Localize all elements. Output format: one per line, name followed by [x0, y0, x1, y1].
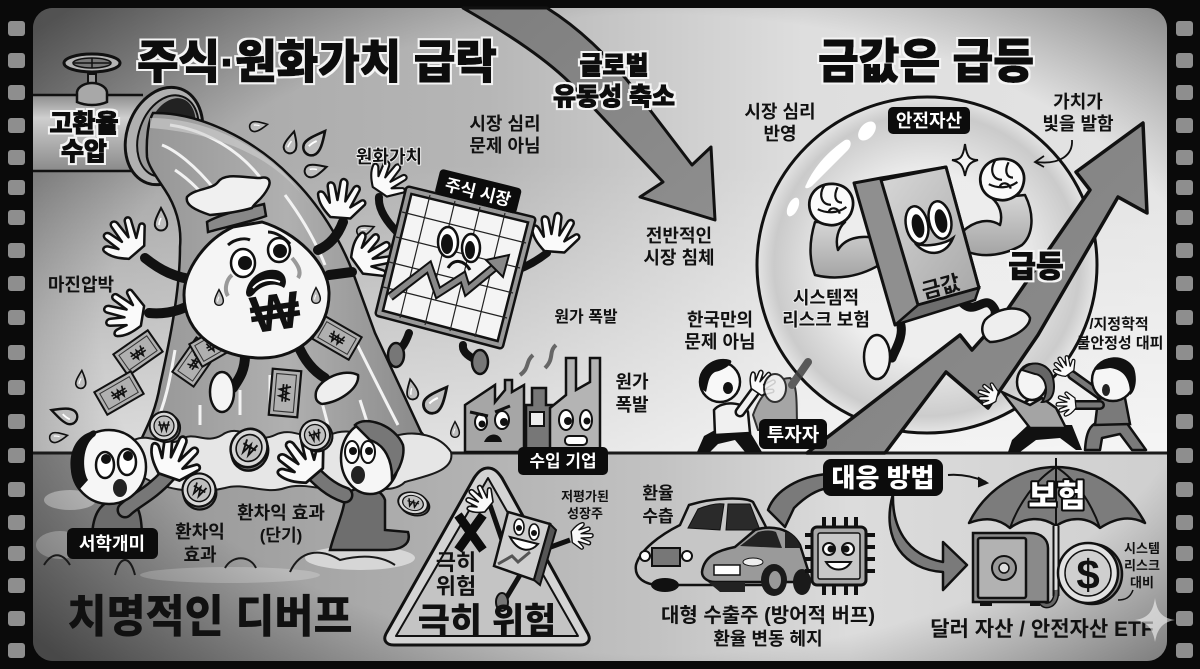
- character: investor man: [697, 359, 781, 452]
- left bicep: [810, 222, 884, 277]
- character: crying money bag: [93, 175, 402, 412]
- label: value shines: 빛을 발함: [1042, 114, 1114, 134]
- gold bar foot: [864, 308, 1030, 379]
- label: geopolitical: [1077, 316, 1163, 352]
- label: undervalued growth stocks: [561, 489, 609, 521]
- label: fx gain effect: 환차익: [175, 522, 225, 542]
- global liquidity arrow: [463, 8, 715, 220]
- label: fx gain effect short term: [237, 503, 325, 545]
- foam: [127, 431, 451, 492]
- label: value shines: 가치가: [1053, 92, 1103, 112]
- danger triangle: [385, 468, 593, 645]
- label: won symbol: ₩: [247, 281, 304, 345]
- label: investors pill: 투자자: [767, 424, 820, 446]
- label: retail investors pill: 서학개미: [79, 534, 145, 554]
- safe: [973, 533, 1048, 604]
- right bicep: [962, 195, 1031, 255]
- label: won value: 원화가치: [356, 147, 422, 167]
- label: systemic risk hedge: 리스크 보험: [782, 310, 870, 330]
- label: market slump: [643, 226, 715, 268]
- label: importers pill: 수입 기업: [529, 452, 597, 471]
- label: surge: 급등: [1008, 251, 1064, 284]
- label: geopolitical: 불안정성 대피: [1077, 335, 1163, 352]
- label: retail investors pill: [67, 528, 158, 559]
- pipe with valve: [33, 54, 216, 196]
- label: market slump: 전반적인: [646, 226, 712, 246]
- label: high exchange rate pressure: 수압: [61, 138, 107, 166]
- label: not only Korea: 문제 아님: [684, 332, 756, 352]
- icon: sparkle: [952, 144, 978, 176]
- back car details: [640, 504, 760, 592]
- label: market slump: 시장 침체: [643, 248, 715, 268]
- label: high exchange rate pressure: 고환율: [49, 110, 119, 138]
- label: margin pressure: 마진압박: [48, 275, 115, 295]
- chip character: [805, 517, 875, 595]
- factories: [465, 345, 600, 452]
- label: high risk small: 위험: [436, 574, 476, 599]
- label: not a sentiment issue: 시장 심리: [469, 114, 541, 134]
- label: undervalued growth stocks: 성장주: [567, 506, 603, 521]
- label: cost explosion two: 원가: [615, 372, 649, 392]
- label: global liquidity: 글로벌: [579, 52, 649, 80]
- label: geopolitical: /지정학적: [1089, 316, 1149, 333]
- label: high exchange rate pressure: [49, 110, 119, 166]
- character: pushing man: [1049, 351, 1146, 450]
- label: exchange rate: 수츱: [642, 507, 674, 526]
- heading: stock and won fall: 주식·원화가치 급락: [137, 36, 497, 88]
- coins: [150, 412, 432, 519]
- label: cost explosion two: 폭발: [615, 395, 649, 415]
- label: dollar assets: 달러 자산 / 안전자산 ETF: [930, 618, 1154, 641]
- label: system risk prep: 대비: [1130, 575, 1154, 590]
- label: systemic risk hedge: [782, 288, 870, 330]
- label: global liquidity: 유동성 축소: [553, 83, 675, 111]
- label: global liquidity: [553, 52, 675, 111]
- label: fx gain effect: [175, 522, 225, 565]
- label: fx hedge: 환율 변동 헤지: [713, 629, 823, 649]
- label: stock market pill: [434, 168, 522, 214]
- dollar coin: $: [1076, 551, 1100, 598]
- money bills: [94, 316, 362, 417]
- water stream: [134, 113, 440, 455]
- snow mounds: [44, 553, 395, 575]
- label: response methods pill: 대응 방법: [832, 463, 934, 493]
- label: importers pill: [518, 447, 608, 475]
- label: high risk small: 극히: [436, 550, 476, 575]
- label: not only Korea: [684, 310, 756, 352]
- label: cost explosion one: 원가 폭발: [554, 308, 618, 326]
- icon: corner sparkle: [1135, 598, 1175, 642]
- bubble with gold bar: [757, 97, 1097, 433]
- label: exchange rate: 환율: [642, 484, 674, 503]
- label: system risk prep: [1124, 541, 1160, 590]
- label: exchange rate: [642, 484, 674, 526]
- label: safe asset pill: [888, 107, 970, 134]
- label: fx gain effect: 효과: [183, 545, 217, 565]
- label: not a sentiment issue: 문제 아님: [469, 136, 541, 156]
- label: fx gain effect short term: 환차익 효과: [237, 503, 325, 523]
- dollar coin: [1058, 543, 1122, 604]
- label: high risk small: [436, 550, 476, 599]
- label: large exporters: 대형 수출주 (방어적 버프): [661, 604, 875, 627]
- rising arrow: [807, 123, 1147, 453]
- label: high risk big: 극히 위험: [418, 602, 556, 641]
- character: 서학개미 investor: [70, 426, 209, 540]
- front car: [702, 528, 811, 596]
- label: system risk prep: 시스템: [1124, 541, 1160, 556]
- label: investors pill: [759, 419, 827, 449]
- people near bubble: [697, 351, 1146, 452]
- label: market sentiment: [744, 102, 816, 144]
- character: pushing woman: [974, 364, 1082, 452]
- label: response methods pill: [823, 459, 943, 496]
- character: investor woman: [753, 362, 808, 430]
- label: market sentiment: 반영: [763, 124, 797, 144]
- umbrella: [969, 458, 1145, 605]
- response arrows: [768, 474, 988, 590]
- heading: fatal debuff: 치명적인 디버프: [68, 591, 352, 642]
- label: market sentiment: 시장 심리: [744, 102, 816, 122]
- label: value shines: [1042, 92, 1114, 134]
- heading: gold surge: 금값은 급등: [818, 35, 1034, 88]
- label: fx gain effect short term: (단기): [260, 526, 302, 545]
- label: systemic risk hedge: 시스템적: [793, 288, 859, 308]
- back car: [636, 499, 780, 585]
- label: not a sentiment issue: [469, 114, 541, 156]
- label: system risk prep: 리스크: [1124, 558, 1160, 573]
- label: gold on bar: 금값: [919, 271, 963, 304]
- label: not only Korea: 한국만의: [687, 310, 753, 330]
- label: stock market pill: 주식 시장: [443, 175, 513, 210]
- splash drops: [49, 119, 459, 443]
- label: insurance: 보험: [1028, 479, 1086, 514]
- label: undervalued growth stocks: 저평가된: [561, 489, 609, 504]
- character: kneeling investor: [266, 421, 409, 550]
- icon: cross mark: [458, 515, 483, 550]
- label: cost explosion two: [615, 372, 649, 415]
- label: safe asset pill: 안전자산: [896, 111, 963, 131]
- ground line: [33, 452, 1167, 454]
- character: stock market chart: [362, 152, 583, 374]
